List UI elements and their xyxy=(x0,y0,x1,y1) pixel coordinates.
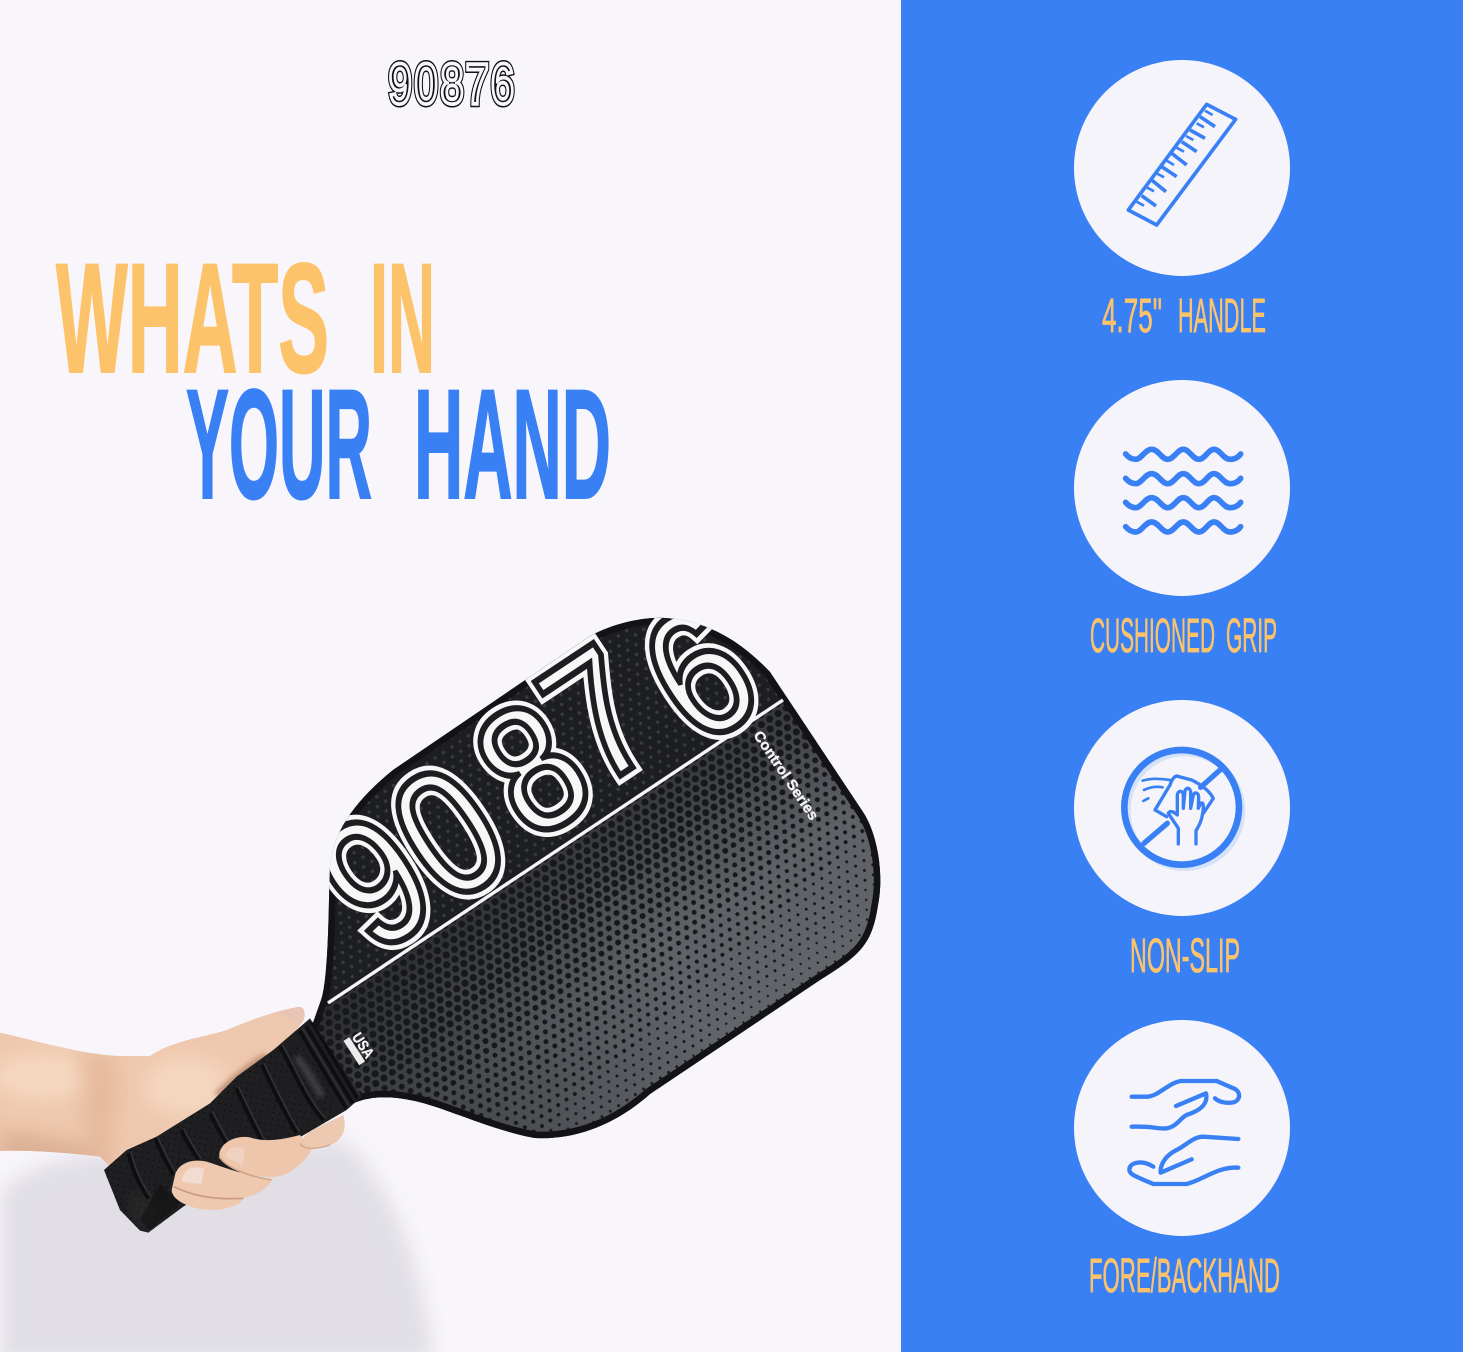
icon: waves xyxy=(1126,449,1241,532)
logo: 90876: 90876 xyxy=(389,54,514,116)
control series label: Control Series xyxy=(750,728,821,823)
icon: ruler xyxy=(1128,104,1236,225)
paddle number 90876: 90876 xyxy=(277,549,791,994)
hand and arm behind the grip xyxy=(0,1006,305,1170)
paddle number 90876: 90876 xyxy=(277,549,791,994)
feature: handle length xyxy=(1074,60,1290,343)
paddle body xyxy=(300,618,880,1138)
label: CUSHIONED xyxy=(1090,610,1215,663)
badge circle xyxy=(1074,380,1290,596)
feature: non-slip xyxy=(1074,700,1290,983)
ring and little fingers xyxy=(172,1161,272,1210)
feature: fore/backhand xyxy=(1074,1020,1290,1303)
grip xyxy=(100,1018,362,1237)
index finger xyxy=(300,1115,345,1148)
badge circle xyxy=(1074,1020,1290,1236)
heading: whats in your hand xyxy=(56,232,611,532)
feature: handle length: HANDLE xyxy=(1178,290,1266,343)
usa mark: USA xyxy=(348,1030,377,1062)
label: 4.75" xyxy=(1102,290,1162,343)
background xyxy=(0,0,901,1352)
paddle face halftone xyxy=(313,618,880,1138)
right blue panel xyxy=(901,0,1463,1352)
icon: two hands xyxy=(1129,1081,1239,1184)
paddle number 90876: 90876 xyxy=(277,549,791,994)
feature: cushioned grip: GRIP xyxy=(1226,610,1277,663)
heading: whats in your hand: WHATS xyxy=(56,232,329,406)
heading: whats in your hand: IN xyxy=(370,232,435,406)
paddle number 90876 xyxy=(329,618,758,950)
feature: cushioned grip xyxy=(1074,380,1290,663)
diagonal white line xyxy=(328,700,783,1003)
icon: no wiping hand xyxy=(1124,750,1242,868)
floor shadow xyxy=(0,1140,433,1352)
label xyxy=(1090,610,1277,663)
fingers over grip xyxy=(172,1115,345,1210)
middle finger xyxy=(219,1135,312,1177)
badge circle xyxy=(1074,60,1290,276)
logo: 90876: 90876 xyxy=(389,54,514,116)
logo: 90876: 90876 xyxy=(389,54,514,116)
paddle xyxy=(313,618,880,1138)
feature: non-slip: NON-SLIP xyxy=(1130,930,1240,983)
text: HAND xyxy=(414,358,611,532)
label xyxy=(1102,290,1266,343)
heading: whats in your hand: YOUR xyxy=(186,358,372,532)
badge circle xyxy=(1074,700,1290,916)
